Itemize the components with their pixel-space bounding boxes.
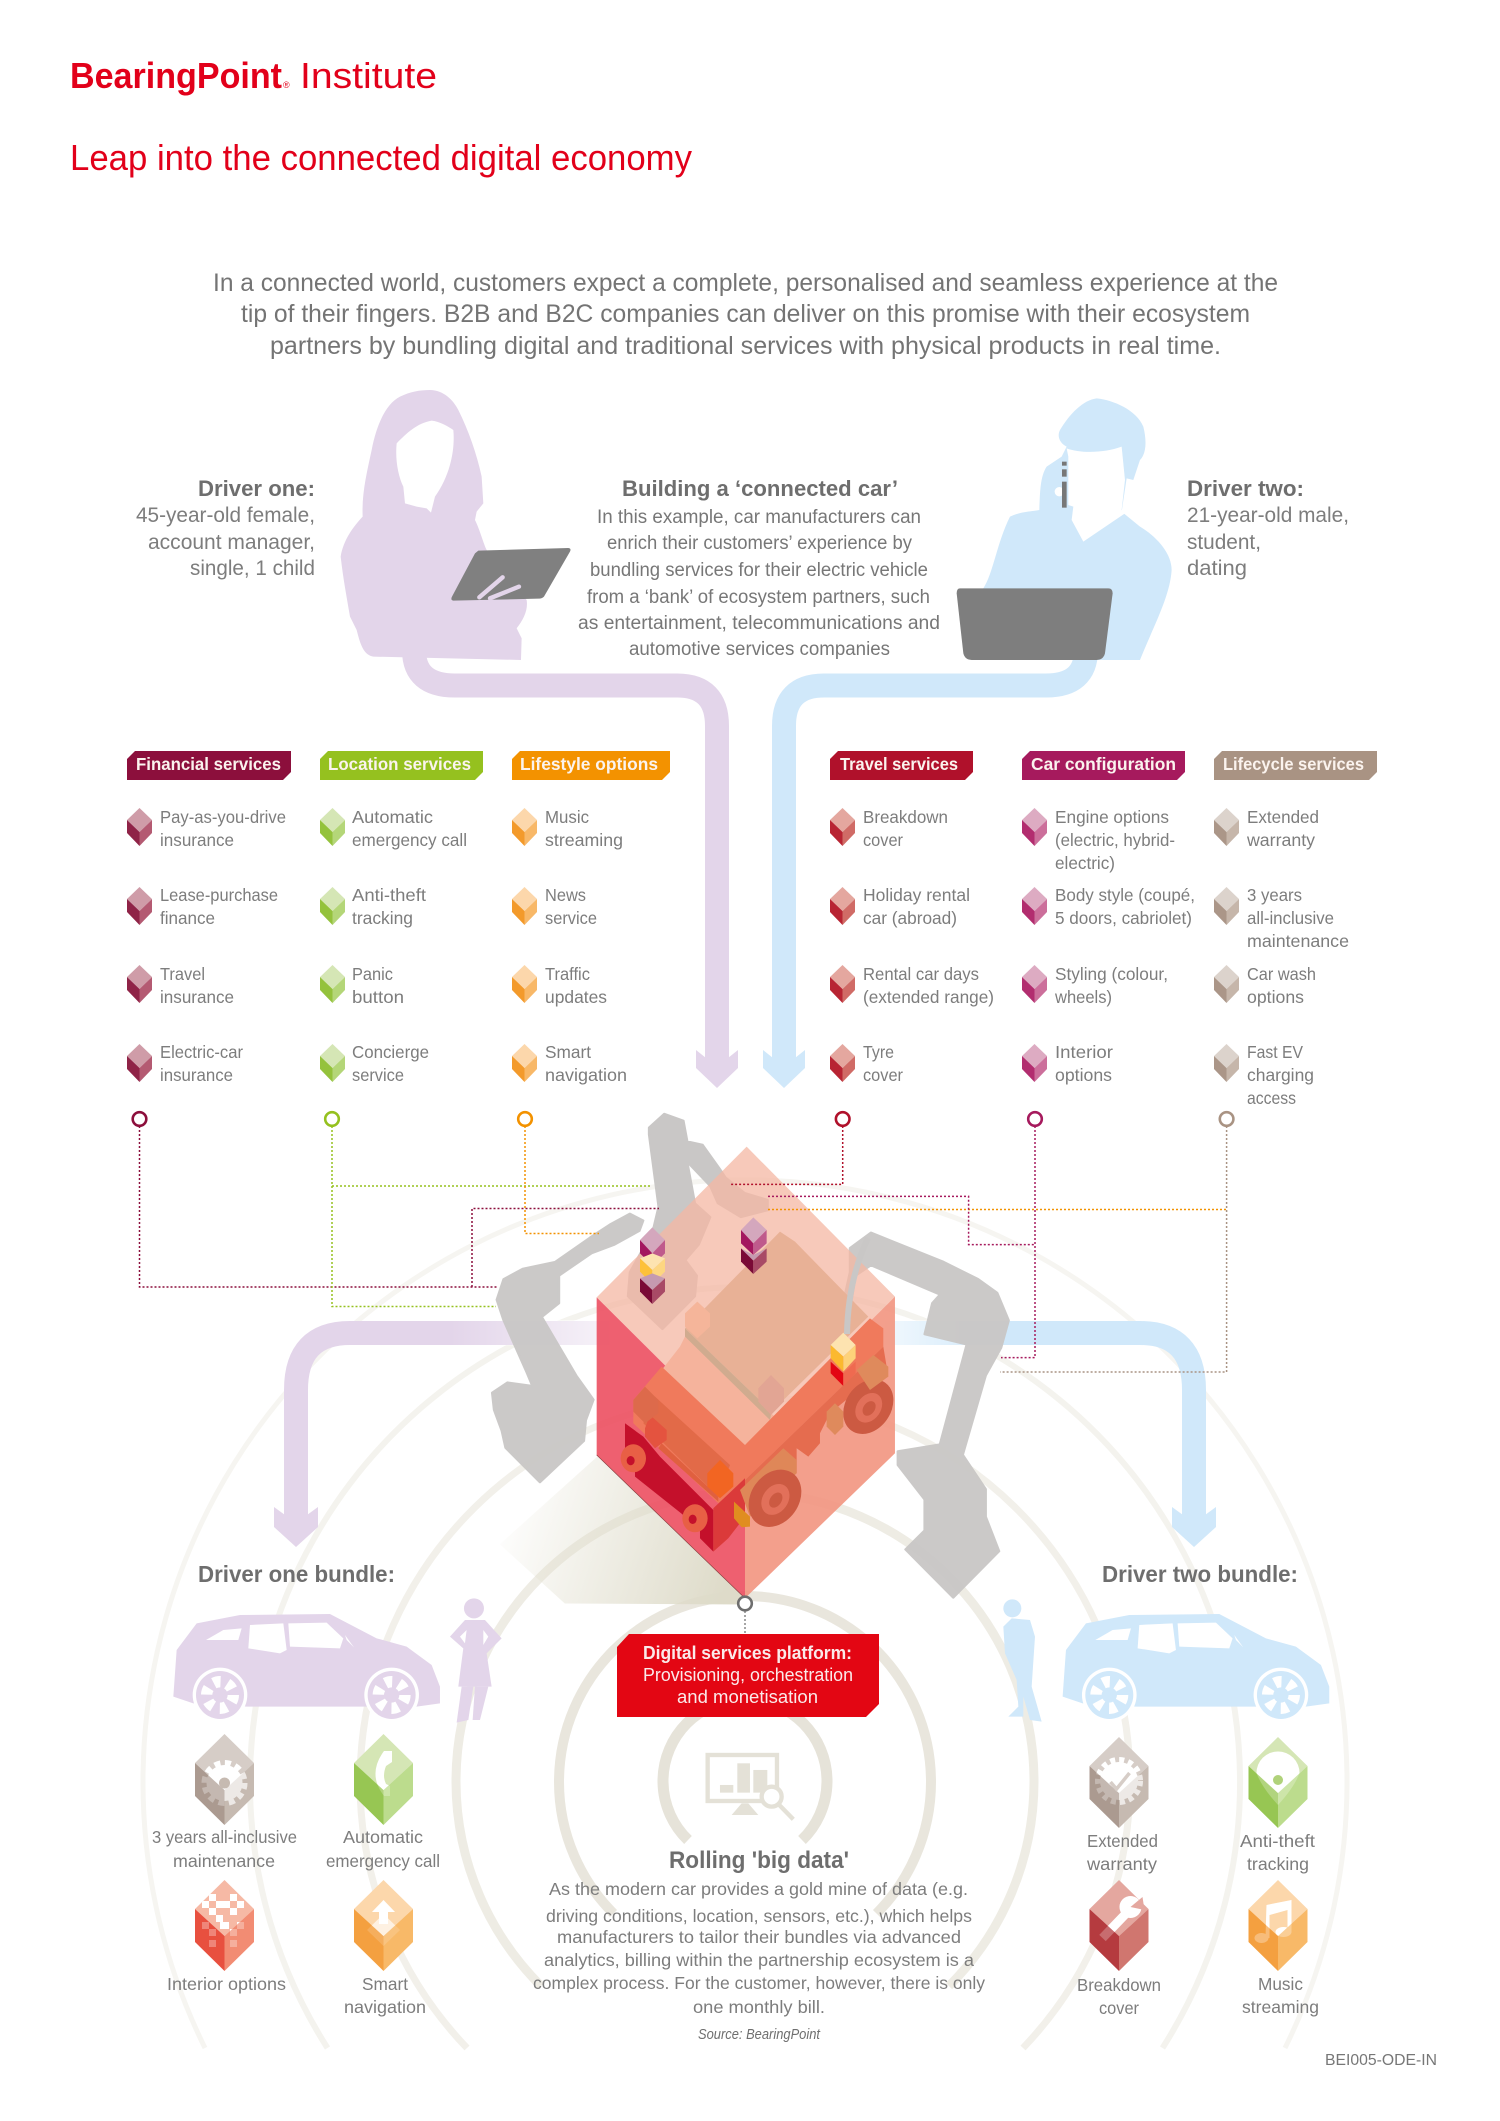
item: emergency call (352, 830, 467, 850)
item (127, 885, 278, 928)
bundle item: interior options (167, 1880, 286, 1994)
floating service cubes (640, 1217, 856, 1415)
item: Lease-purchase (160, 885, 278, 905)
bundle item: breakdown cover: Breakdown (1077, 1975, 1161, 1995)
arrow: driver one bundle (274, 1320, 610, 1547)
tab (1022, 751, 1185, 780)
bundle item: 3 years all-inclusive maintenance: 3 years all-inclusive (152, 1827, 297, 1847)
tab: Lifestyle options (520, 754, 658, 774)
intro text: tip of their fingers. B2B and B2C companies can deliver on this promise with their ecosystem (241, 300, 1250, 328)
item: options (1247, 987, 1304, 1007)
item (320, 885, 426, 928)
cube: faces (597, 1147, 895, 1598)
item: updates (545, 987, 607, 1007)
item: Travel (160, 964, 205, 984)
tab (830, 751, 973, 780)
item: insurance (160, 830, 234, 850)
tab: Car configuration (1031, 754, 1176, 774)
item: electric) (1055, 853, 1115, 873)
text: rolling big data: complex process. For the customer, however, there is only (533, 1973, 985, 1993)
item (320, 1042, 429, 1085)
bundle item: anti-theft tracking: Anti-theft (1240, 1831, 1315, 1851)
tab: Financial services (136, 754, 281, 774)
document code: BEI005-ODE-IN (1325, 2052, 1437, 2069)
item (830, 1042, 903, 1085)
item: Body style (coupé, (1055, 885, 1195, 905)
bundle item: extended warranty: Extended (1087, 1831, 1158, 1851)
text: rolling big data: Rolling 'big data' (669, 1847, 849, 1874)
driver one profile: account manager, (148, 531, 315, 554)
bundle item: music streaming: streaming (1242, 1997, 1319, 2017)
item (512, 807, 623, 850)
connected car model (621, 1318, 904, 1552)
bundle item: smart navigation: navigation (344, 1997, 426, 2017)
building a connected car text: bundling services for their electric vehicle (590, 560, 928, 581)
dotted connector lines (140, 1126, 1227, 1634)
tab: Travel services (840, 754, 958, 774)
bundle item: music streaming: Music (1258, 1974, 1303, 1994)
callout: digital services platform (617, 1634, 879, 1717)
connected car cube (597, 1147, 904, 1598)
item: Breakdown (863, 807, 948, 827)
car: driver one (173, 1614, 440, 1722)
bundle item: anti-theft tracking: tracking (1247, 1854, 1309, 1874)
driver two profile: Driver two: (1187, 476, 1304, 501)
building a connected car text: In this example, car manufacturers can (597, 507, 921, 528)
driver one profile: 45-year-old female, (136, 504, 315, 527)
item (1022, 1042, 1113, 1085)
panel: lifecycle services (1214, 751, 1377, 1108)
building a connected car text (578, 476, 940, 660)
tab (127, 751, 291, 780)
icon: big data monitor (708, 1755, 793, 1819)
silhouette: driver two man with laptop (957, 398, 1172, 660)
item: Automatic (352, 807, 433, 827)
item (830, 885, 970, 928)
item (512, 964, 607, 1007)
bundle item: 3 years all-inclusive maintenance: maintenance (173, 1851, 275, 1871)
item: 3 years (1247, 885, 1302, 905)
bundle item: automatic emergency call: Automatic (343, 1827, 423, 1847)
item (320, 964, 404, 1007)
bundle item: breakdown cover: cover (1099, 1998, 1139, 2018)
robot arms and cube shadow (492, 1114, 1009, 1605)
bundle item: extended warranty: warranty (1086, 1854, 1157, 1874)
item: cover (863, 1065, 903, 1085)
robot arm: left (492, 1214, 643, 1482)
item (1022, 964, 1168, 1007)
tab (512, 751, 670, 780)
item (1022, 885, 1195, 928)
tab (320, 751, 483, 780)
bundle item: 3 years all-inclusive maintenance (152, 1734, 297, 1871)
figure: woman (450, 1598, 502, 1723)
panel: location services (320, 751, 483, 1085)
item: Pay-as-you-drive (160, 807, 286, 827)
item: Fast EV (1247, 1042, 1303, 1062)
arrow: driver two bundle (885, 1320, 1216, 1547)
item: Traffic (545, 964, 590, 984)
panel: lifestyle options (512, 751, 670, 1085)
bundle item: anti-theft tracking (1240, 1737, 1315, 1874)
item: Anti-theft (352, 885, 426, 905)
item (127, 1042, 243, 1085)
item (830, 964, 994, 1007)
building a connected car text: Building a ‘connected car’ (622, 476, 898, 501)
item: options (1055, 1065, 1112, 1085)
cube shadow (500, 1456, 745, 1605)
bundle item: interior options: Interior options (167, 1974, 286, 1994)
item: 5 doors, cabriolet) (1055, 908, 1192, 928)
building a connected car text: automotive services companies (629, 639, 890, 660)
item: button (352, 987, 404, 1007)
item (320, 807, 467, 850)
item: Engine options (1055, 807, 1169, 827)
logo: BearingPoint Institute: BearingPoint (70, 55, 282, 96)
title: Leap into the connected digital economy (70, 137, 692, 178)
text: rolling big data (533, 1847, 985, 2017)
bundle item: breakdown cover (1077, 1880, 1161, 2018)
item: Holiday rental (863, 885, 970, 905)
item: Car wash (1247, 964, 1316, 984)
driver two profile: student, (1187, 531, 1261, 554)
callout: digital services platform: Provisioning, orchestration (643, 1665, 853, 1685)
tab: Location services (328, 754, 471, 774)
bundle item: smart navigation: Smart (362, 1974, 408, 1994)
logo: BearingPoint Institute: ® (283, 80, 290, 90)
item: wheels) (1054, 987, 1112, 1007)
bundle item: smart navigation (344, 1880, 426, 2017)
arrow: driver two to services (763, 650, 1086, 1088)
driver two profile: dating (1187, 557, 1247, 580)
intro text: partners by bundling digital and traditional services with physical products in real time. (270, 332, 1221, 360)
arrow: driver one to services (414, 650, 738, 1088)
item: service (352, 1065, 404, 1085)
item: Tyre (863, 1042, 894, 1062)
item: Electric-car (160, 1042, 243, 1062)
item (1214, 885, 1349, 951)
connector nodes (133, 1112, 1233, 1610)
text: rolling big data: As the modern car provides a gold mine of data (e.g. (549, 1879, 968, 1899)
item: (extended range) (863, 987, 994, 1007)
building a connected car text: enrich their customers’ experience by (607, 533, 912, 554)
item: warranty (1246, 830, 1315, 850)
robot arm: right (840, 1233, 1009, 1598)
item: insurance (160, 987, 234, 1007)
callout: digital services platform: and monetisation (677, 1687, 818, 1707)
item (1214, 1042, 1314, 1108)
robot gripper arm (847, 1238, 868, 1334)
item: charging (1247, 1065, 1314, 1085)
driver two profile: 21-year-old male, (1187, 504, 1349, 527)
tab (1214, 751, 1377, 780)
figure: man (1003, 1599, 1042, 1722)
driver one profile: Driver one: (198, 476, 315, 501)
robot arm: top (628, 1114, 768, 1329)
item: finance (160, 908, 215, 928)
item (127, 807, 286, 850)
heading: driver two bundle: Driver two bundle: (1102, 1561, 1298, 1587)
item: Smart (545, 1042, 591, 1062)
item: cover (863, 830, 903, 850)
item: Concierge (352, 1042, 429, 1062)
item: Interior (1055, 1042, 1113, 1062)
item: (electric, hybrid- (1055, 830, 1175, 850)
bundle item: automatic emergency call: emergency call (326, 1851, 440, 1871)
source note: Source: BearingPoint (698, 2027, 821, 2043)
car: driver two (1063, 1614, 1329, 1722)
panel: financial services (127, 751, 291, 1085)
text: rolling big data: manufacturers to tailor their bundles via advanced (557, 1927, 961, 1947)
driver one profile (136, 476, 315, 580)
panel: car configuration (1022, 751, 1195, 1085)
item: streaming (545, 830, 623, 850)
heading: driver one bundle: Driver one bundle: (198, 1561, 395, 1587)
text: rolling big data: analytics, billing within the partnership ecosystem is a (544, 1950, 974, 1970)
building a connected car text: from a ‘bank’ of ecosystem partners, such (587, 587, 930, 608)
item (512, 1042, 627, 1085)
concentric data rings (143, 1180, 1347, 2048)
item (830, 807, 948, 850)
bundle item: extended warranty (1086, 1737, 1158, 1874)
item: access (1247, 1088, 1296, 1108)
cube: interior floor (650, 1232, 868, 1445)
item: navigation (545, 1065, 627, 1085)
building a connected car text: as entertainment, telecommunications and (578, 613, 940, 634)
item: Panic (352, 964, 393, 984)
item: service (545, 908, 597, 928)
silhouette: driver one woman with tablet (341, 390, 571, 660)
text: rolling big data: one monthly bill. (693, 1997, 825, 2017)
callout: digital services platform: Digital services platform: (643, 1643, 852, 1663)
item: car (abroad) (863, 908, 957, 928)
logo: BearingPoint Institute: Institute (300, 55, 437, 96)
item: tracking (352, 908, 413, 928)
item (127, 964, 234, 1007)
item: insurance (160, 1065, 233, 1085)
panel: travel services (830, 751, 994, 1085)
intro text (213, 269, 1278, 360)
item: maintenance (1247, 931, 1349, 951)
bundle item: music streaming (1242, 1880, 1319, 2017)
intro text: In a connected world, customers expect a complete, personalised and seamless experience at the (213, 269, 1278, 297)
driver two profile (1187, 476, 1349, 580)
item: Extended (1247, 807, 1319, 827)
logo: BearingPoint Institute (70, 55, 437, 96)
tab: Lifecycle services (1223, 754, 1364, 774)
item (512, 885, 597, 928)
item: all-inclusive (1247, 908, 1334, 928)
text: rolling big data: driving conditions, location, sensors, etc.), which helps (546, 1906, 972, 1926)
item: News (545, 885, 586, 905)
item: Rental car days (863, 964, 979, 984)
item (1214, 964, 1316, 1007)
item (1022, 807, 1175, 873)
bundle item: automatic emergency call (326, 1734, 440, 1871)
item: Styling (colour, (1055, 964, 1168, 984)
driver one profile: single, 1 child (190, 557, 315, 580)
item (1214, 807, 1319, 850)
item: Music (545, 807, 589, 827)
